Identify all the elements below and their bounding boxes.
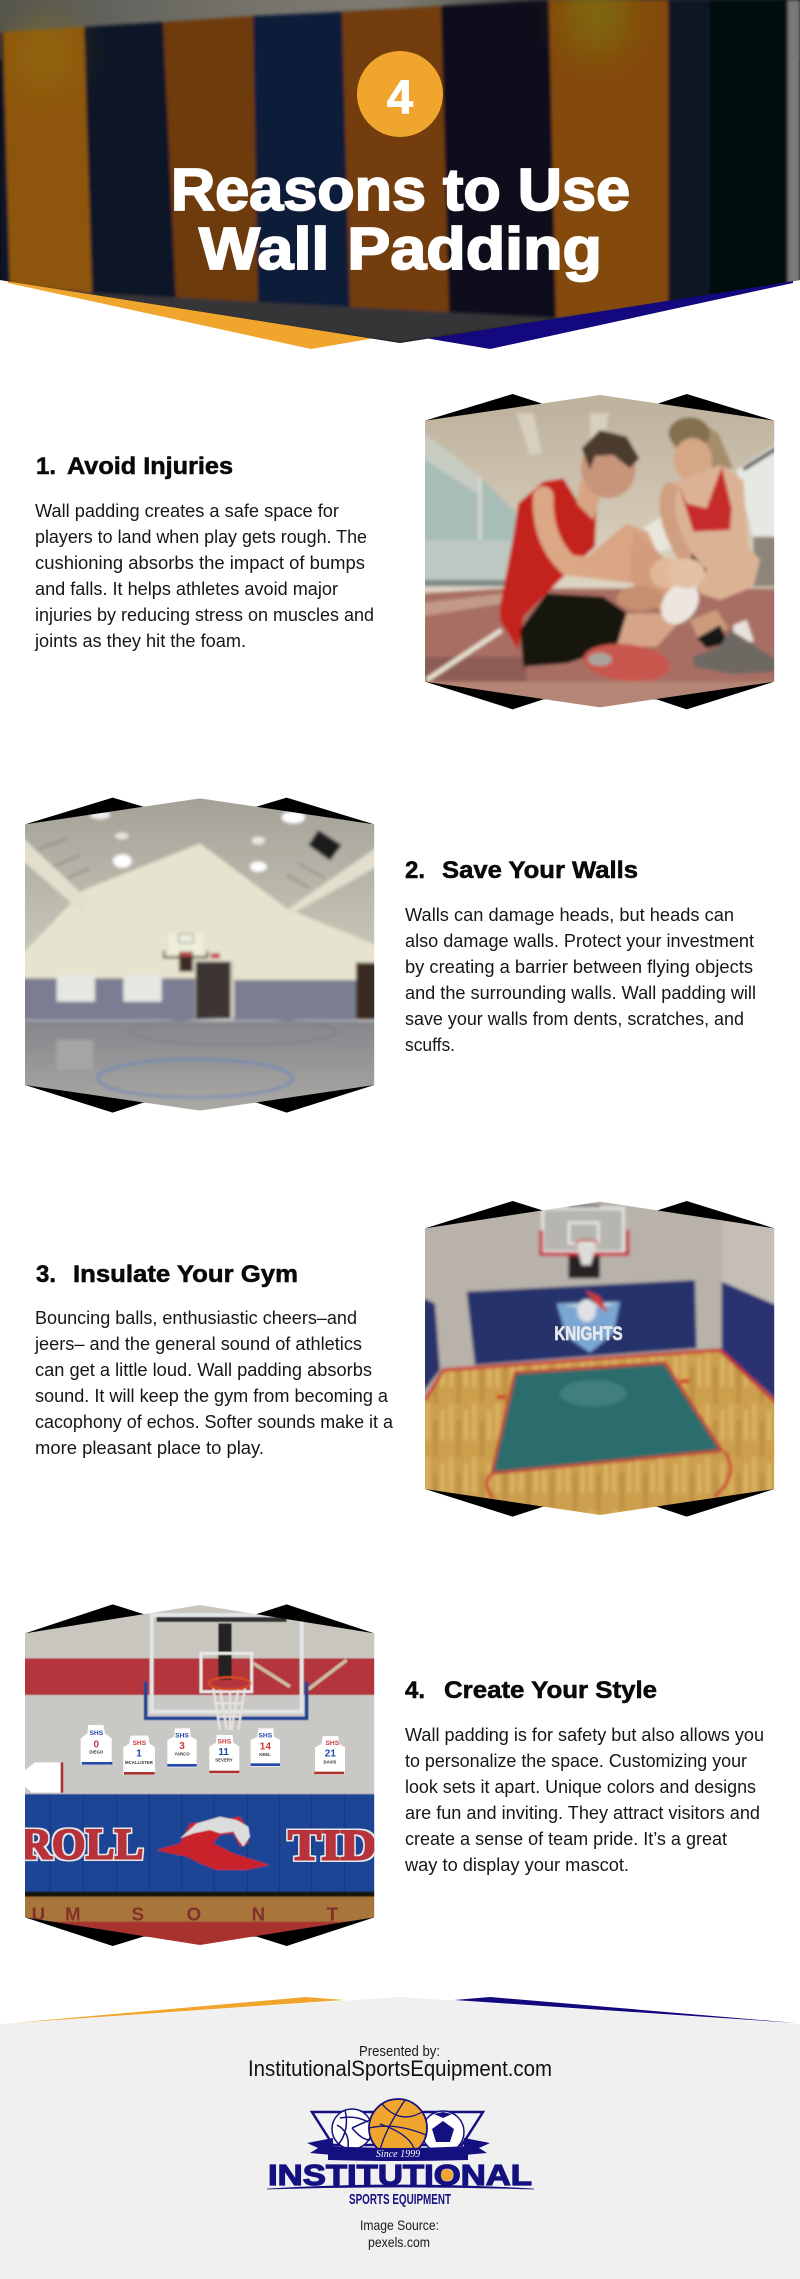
photo 4: Roll Tide wall pads: 0	[94, 1739, 100, 1750]
black corner tips	[25, 798, 374, 1113]
body 2: by creating a barrier between flying objects	[405, 957, 753, 977]
heading 3: 3.	[36, 1261, 56, 1288]
photo 4: Roll Tide wall pads: SHS	[258, 1733, 273, 1740]
body 1: cushioning absorbs the impact of bumps	[35, 553, 365, 573]
body 2: scuffs.	[405, 1035, 455, 1055]
body 4: way to display your mascot.	[404, 1855, 629, 1875]
ribbon banner	[307, 2138, 490, 2161]
body 1: Wall padding creates a safe space for	[35, 501, 339, 521]
heading 2: 2.	[405, 857, 425, 884]
logo	[267, 2099, 534, 2208]
body 4: look sets it apart. Unique colors and designs	[405, 1777, 756, 1797]
body 2: save your walls from dents, scratches, and	[405, 1009, 744, 1029]
body 1: and falls. It helps athletes avoid major	[35, 579, 338, 599]
footer blue accent	[454, 1997, 796, 2023]
photo 4: Roll Tide wall pads: SHS	[217, 1739, 232, 1746]
orange accent	[8, 278, 375, 349]
body 1: players to land when play gets rough. The	[35, 527, 367, 547]
body 1: injuries by reducing stress on muscles and	[35, 605, 374, 625]
body 2	[405, 905, 756, 1055]
body 1	[34, 501, 374, 651]
number badge	[357, 51, 443, 137]
black corner tips	[425, 394, 774, 709]
heading 1: Avoid Injuries	[67, 453, 233, 480]
icon: soccer ball	[422, 2111, 464, 2153]
photo 3: knights gym	[420, 1197, 780, 1520]
body 4: to personalize the space. Customizing your	[405, 1751, 747, 1771]
footer panel	[0, 1997, 800, 2279]
photo 4: Roll Tide wall pads: SHS	[175, 1733, 189, 1740]
body 4: are fun and inviting. They attract visitors and	[405, 1803, 760, 1823]
logo: Since 1999	[376, 2149, 420, 2160]
photo 4: Roll Tide wall pads: TIDE	[288, 1821, 410, 1869]
photo 4: Roll Tide wall pads: UMSONT	[32, 1904, 339, 1925]
presented by: Presented by:	[359, 2044, 440, 2060]
body 4	[404, 1725, 764, 1875]
body 1: joints as they hit the foam.	[34, 631, 246, 651]
image source: Image Source:	[360, 2217, 439, 2233]
heading 4: 4.	[405, 1677, 425, 1704]
body 3: more pleasant place to play.	[35, 1438, 264, 1458]
website: InstitutionalSportsEquipment.com	[248, 2056, 552, 2081]
photo 4: Roll Tide wall pads: DIEGO	[89, 1749, 104, 1754]
photo 4: Roll Tide wall pads: DAVIS	[324, 1759, 337, 1764]
body 2: also damage walls. Protect your investment	[405, 931, 754, 951]
body 3: Bouncing balls, enthusiastic cheers–and	[35, 1308, 357, 1328]
number badge: 4	[387, 70, 413, 123]
icon: basketball	[369, 2099, 427, 2157]
photo 4: Roll Tide wall pads: SHS	[89, 1730, 104, 1737]
heading 1: 1.	[36, 453, 56, 480]
body 4: Wall padding is for safety but also allows you	[405, 1725, 764, 1745]
photo 4: Roll Tide wall pads: 21	[325, 1749, 336, 1760]
photo 4: Roll Tide wall pads: MCALLISTER	[125, 1760, 154, 1765]
body 3: jeers– and the general sound of athletics	[34, 1334, 362, 1354]
image source	[360, 2217, 439, 2250]
image source: pexels.com	[368, 2234, 430, 2250]
footer orange accent	[13, 1997, 344, 2023]
photo 4: Roll Tide wall pads: 3	[179, 1741, 185, 1752]
body 4: create a sense of team pride. It’s a great	[405, 1829, 727, 1849]
section 4 text	[404, 1677, 764, 1875]
footer	[0, 1997, 800, 2279]
photo 3: knights gym: KNIGHTS	[554, 1324, 623, 1345]
icon: volleyball	[332, 2109, 372, 2149]
header photo: padded wall	[0, 0, 800, 343]
body 2: Walls can damage heads, but heads can	[405, 905, 734, 925]
blue accent	[425, 278, 793, 349]
section 2 text	[405, 857, 756, 1055]
body 3: can get a little loud. Wall padding absorbs	[35, 1360, 372, 1380]
title: Reasons to Use	[171, 157, 630, 223]
photo 4: Roll Tide wall pads: SHS	[325, 1740, 340, 1747]
photo 4: Roll Tide wall pads: SEVERY	[215, 1757, 233, 1762]
black corner tips	[425, 1201, 774, 1517]
heading 2: Save Your Walls	[442, 857, 638, 884]
photo 4: Roll Tide wall pads: KEEL	[259, 1752, 271, 1757]
institutional wordmark: INSTITUTIONAL	[268, 2160, 532, 2192]
section 1 text	[34, 453, 374, 651]
black corner tips	[25, 1604, 374, 1946]
body 3	[34, 1308, 394, 1458]
section 3 text	[34, 1261, 394, 1458]
sports equipment wordmark: SPORTS EQUIPMENT	[349, 2191, 451, 2208]
title	[171, 157, 630, 282]
body 2: and the surrounding walls. Wall padding will	[405, 983, 756, 1003]
photo 4: Roll Tide wall pads: YARCO	[174, 1752, 190, 1757]
heading 3: Insulate Your Gym	[73, 1261, 298, 1288]
title: Wall Padding	[199, 216, 602, 282]
photo 4: Roll Tide wall pads: 14	[260, 1741, 271, 1752]
photo 4: Roll Tide wall pads: 11	[218, 1747, 229, 1758]
photo 4: Roll Tide wall pads: 1	[136, 1749, 142, 1760]
header banner	[0, 0, 800, 349]
body 3: cacophony of echos. Softer sounds make it a	[35, 1412, 394, 1432]
photo 1: athletes with knee injury	[420, 390, 780, 713]
photo 2: empty gym	[20, 793, 380, 1117]
photo 4: Roll Tide wall pads: ROLL	[21, 1821, 143, 1869]
heading 4: Create Your Style	[444, 1677, 657, 1704]
photo 4: Roll Tide wall pads	[25, 1604, 374, 1946]
photo 4: Roll Tide wall pads: SHS	[132, 1740, 147, 1747]
body 3: sound. It will keep the gym from becoming a	[35, 1386, 389, 1406]
